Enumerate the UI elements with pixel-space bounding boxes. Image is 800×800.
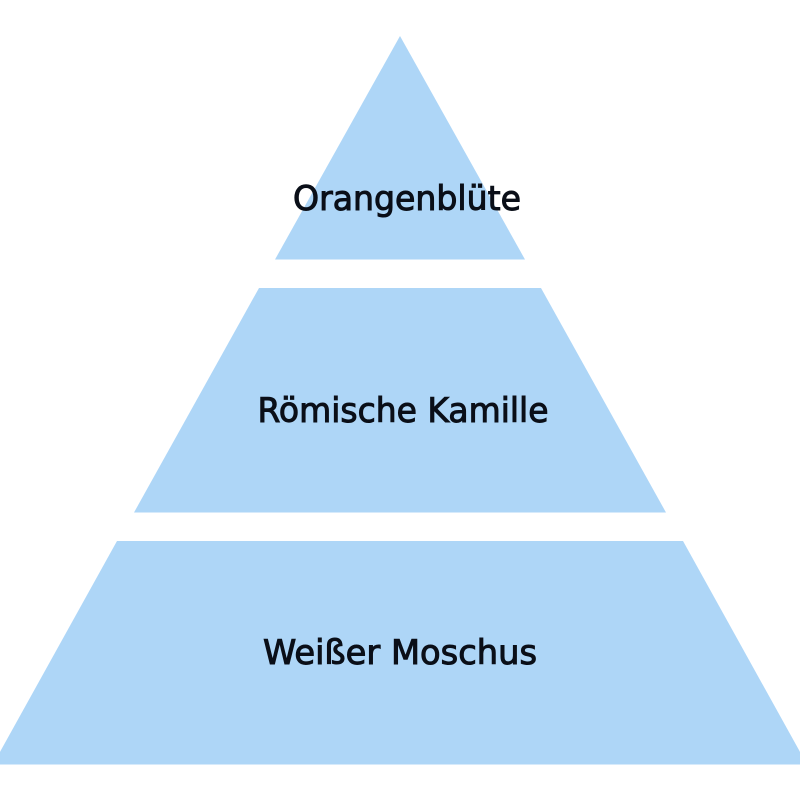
label: Weißer Moschus: Weißer Moschus (263, 633, 537, 673)
label: Orangenblüte: Orangenblüte (293, 179, 521, 219)
pyramid tier: bottom (0, 541, 800, 764)
label: Römische Kamille: Römische Kamille (258, 391, 548, 431)
pyramid tier: top (275, 36, 525, 260)
pyramid tier: middle (134, 288, 666, 512)
